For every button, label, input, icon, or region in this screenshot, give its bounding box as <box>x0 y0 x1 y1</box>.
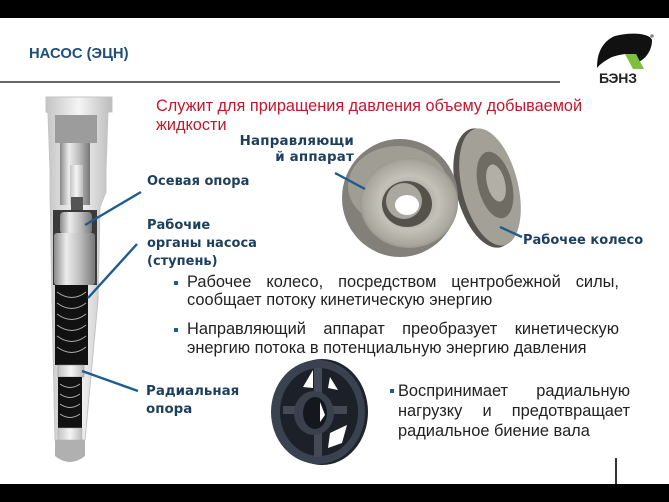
radial bearing photo <box>271 359 368 465</box>
impeller and diffuser photo <box>342 128 521 257</box>
subtitle: жидкости <box>156 116 227 134</box>
bullet text: radial load <box>390 382 630 440</box>
subtitle: Служит для приращения давления объему добываемой <box>156 97 582 115</box>
label: pump stages: (ступень) <box>147 254 218 269</box>
leader lines: photo <box>334 172 522 238</box>
bullet text: impeller: сообщает потоку кинетическую энергию <box>187 291 492 309</box>
top black bar <box>0 0 669 18</box>
header rule <box>0 81 560 83</box>
label: impeller: Рабочее колесо <box>523 233 643 248</box>
label: radial bearing: Радиальная <box>146 384 239 399</box>
label: axial bearing: Осевая опора <box>147 174 249 189</box>
icon: BENZ logo <box>597 34 654 86</box>
bullet text: radial load: Воспринимает радиальную <box>398 382 630 400</box>
bottom black bar <box>0 484 669 502</box>
label: diffuser: й аппарат <box>275 150 354 165</box>
bullet text: radial load: радиальное биение вала <box>398 422 590 440</box>
bullet text: diffuser: энергию потока в потенциальную энергию давления <box>187 339 587 357</box>
bullet text: diffuser <box>174 320 619 357</box>
label: radial bearing: опора <box>146 402 192 417</box>
bullet text: impeller <box>174 273 619 309</box>
label: pump stages: Рабочие <box>147 218 210 233</box>
label: pump stages <box>147 218 257 269</box>
label: radial bearing <box>146 384 239 417</box>
icon: BENZ logo: БЭНЗ <box>599 70 637 86</box>
pump cutaway illustration <box>46 96 112 462</box>
label: diffuser: Направляющи <box>240 134 354 149</box>
bullet text: radial load: нагрузку и предотвращает <box>398 402 630 420</box>
bullet text: impeller: Рабочее колесо, посредством центробежной силы, <box>187 273 619 291</box>
label: diffuser <box>240 134 354 165</box>
title: НАСОС (ЭЦН) <box>29 46 129 62</box>
label: pump stages: органы насоса <box>147 236 257 251</box>
bullet text: diffuser: Направляющий аппарат преобразует кинетическую <box>187 320 619 338</box>
page number divider <box>615 458 617 484</box>
subtitle <box>156 97 582 134</box>
